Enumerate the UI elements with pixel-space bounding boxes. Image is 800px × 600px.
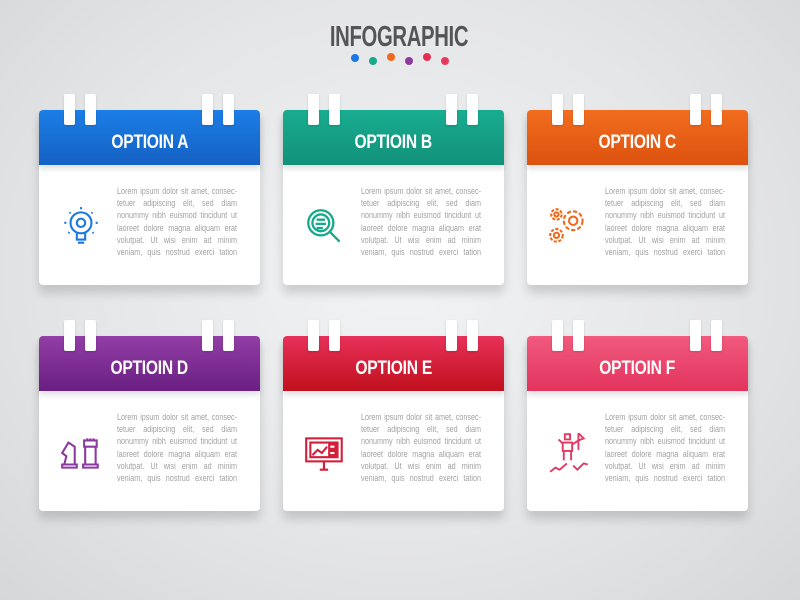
icon: lightbulb gear (64, 207, 98, 244)
text C: veniam, quis nostrud exerci tation (605, 247, 725, 257)
text D: tetuer adipiscing elit, sed diam (117, 424, 237, 434)
header F: OPTIOIN F (600, 358, 675, 379)
text A: nonummy nibh euismod tincidunt ut (117, 210, 237, 220)
header D (39, 336, 260, 391)
text E (361, 412, 481, 483)
header C (527, 110, 748, 165)
icon: chess (60, 438, 99, 469)
text D: nonummy nibh euismod tincidunt ut (117, 436, 237, 446)
header C: OPTIOIN C (599, 132, 676, 153)
text A (117, 186, 237, 257)
text B (361, 186, 481, 257)
text A: volutpat. Ut wisi enim ad minim (117, 235, 237, 245)
text F: tetuer adipiscing elit, sed diam (605, 424, 725, 434)
title: INFOGRAPHIC (330, 21, 468, 53)
text E: Lorem ipsum dolor sit amet, consec- (361, 412, 481, 422)
text D: veniam, quis nostrud exerci tation (117, 473, 237, 483)
text B: nonummy nibh euismod tincidunt ut (361, 210, 481, 220)
text E: volutpat. Ut wisi enim ad minim (361, 461, 481, 471)
text D: laoreet dolore magna aliquam erat (117, 449, 237, 459)
text A: tetuer adipiscing elit, sed diam (117, 198, 237, 208)
text A: veniam, quis nostrud exerci tation (117, 247, 237, 257)
text F: nonummy nibh euismod tincidunt ut (605, 436, 725, 446)
panel: option D (34, 320, 264, 522)
header B (283, 110, 504, 165)
text E: tetuer adipiscing elit, sed diam (361, 424, 481, 434)
header A (39, 110, 260, 165)
text B: Lorem ipsum dolor sit amet, consec- (361, 186, 481, 196)
text C: volutpat. Ut wisi enim ad minim (605, 235, 725, 245)
text B: volutpat. Ut wisi enim ad minim (361, 235, 481, 245)
text D: volutpat. Ut wisi enim ad minim (117, 461, 237, 471)
icon: presentation board (305, 437, 343, 471)
panel: option F (522, 320, 752, 522)
text C: tetuer adipiscing elit, sed diam (605, 198, 725, 208)
text C: laoreet dolore magna aliquam erat (605, 223, 725, 233)
header A: OPTIOIN A (111, 132, 188, 153)
text A: Lorem ipsum dolor sit amet, consec- (117, 186, 237, 196)
icon: gears (549, 208, 584, 243)
text E: veniam, quis nostrud exerci tation (361, 473, 481, 483)
panel: option A (34, 94, 264, 296)
text F: laoreet dolore magna aliquam erat (605, 449, 725, 459)
text C: nonummy nibh euismod tincidunt ut (605, 210, 725, 220)
text D (117, 412, 237, 483)
text E: nonummy nibh euismod tincidunt ut (361, 436, 481, 446)
text C: Lorem ipsum dolor sit amet, consec- (605, 186, 725, 196)
text F: veniam, quis nostrud exerci tation (605, 473, 725, 483)
text F: Lorem ipsum dolor sit amet, consec- (605, 412, 725, 422)
text F (605, 412, 725, 483)
panel: option E (278, 320, 508, 522)
text C (605, 186, 725, 257)
text B: laoreet dolore magna aliquam erat (361, 223, 481, 233)
header B: OPTIOIN B (355, 132, 432, 153)
text B: tetuer adipiscing elit, sed diam (361, 198, 481, 208)
text D: Lorem ipsum dolor sit amet, consec- (117, 412, 237, 422)
panel: option C (522, 94, 752, 296)
text E: laoreet dolore magna aliquam erat (361, 449, 481, 459)
header E: OPTIOIN E (355, 358, 432, 379)
icon: climber with flag (550, 432, 588, 472)
panel: option B (278, 94, 508, 296)
icon: magnifier (307, 209, 340, 242)
text B: veniam, quis nostrud exerci tation (361, 247, 481, 257)
text F: volutpat. Ut wisi enim ad minim (605, 461, 725, 471)
header D: OPTIOIN D (111, 358, 188, 379)
header F (527, 336, 748, 391)
header E (283, 336, 504, 391)
text A: laoreet dolore magna aliquam erat (117, 223, 237, 233)
